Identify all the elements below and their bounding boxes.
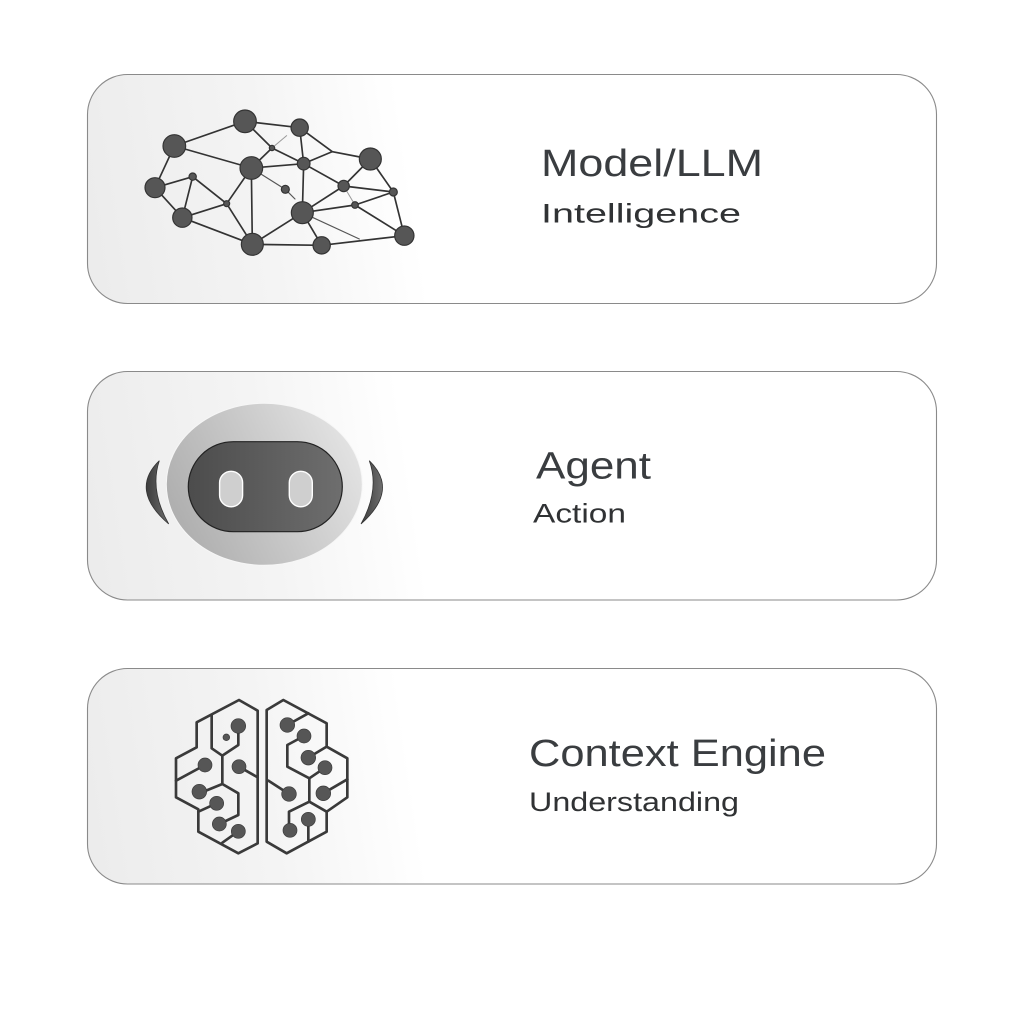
icon: circuit brain (176, 700, 347, 853)
panel: Model/LLM (88, 74, 936, 304)
left eye (220, 471, 243, 507)
subheading: Action: Action (533, 498, 626, 528)
heading: Context Engine: Context Engine (529, 733, 826, 775)
network links (155, 121, 404, 245)
robot face visor (188, 442, 342, 532)
robot head shell (166, 403, 362, 565)
icon: neural network cloud (145, 110, 414, 255)
subheading: Understanding: Understanding (529, 787, 739, 817)
left ear arc (146, 461, 169, 524)
right eye (289, 471, 312, 507)
right hemisphere nodes (280, 718, 332, 837)
right ear arc (361, 461, 383, 524)
card background (88, 668, 936, 884)
panel: Agent (88, 372, 936, 600)
heading: Agent: Agent (536, 445, 652, 487)
panel: Context Engine (88, 668, 936, 884)
heading: Model/LLM: Model/LLM (541, 143, 763, 185)
network nodes (145, 110, 414, 255)
icon: robot head (146, 403, 383, 565)
card background (88, 372, 936, 600)
subheading: Intelligence: Intelligence (541, 198, 741, 228)
left hemisphere nodes (192, 719, 246, 838)
left hemisphere (176, 700, 258, 853)
card background (88, 74, 936, 304)
right hemisphere (267, 700, 347, 853)
